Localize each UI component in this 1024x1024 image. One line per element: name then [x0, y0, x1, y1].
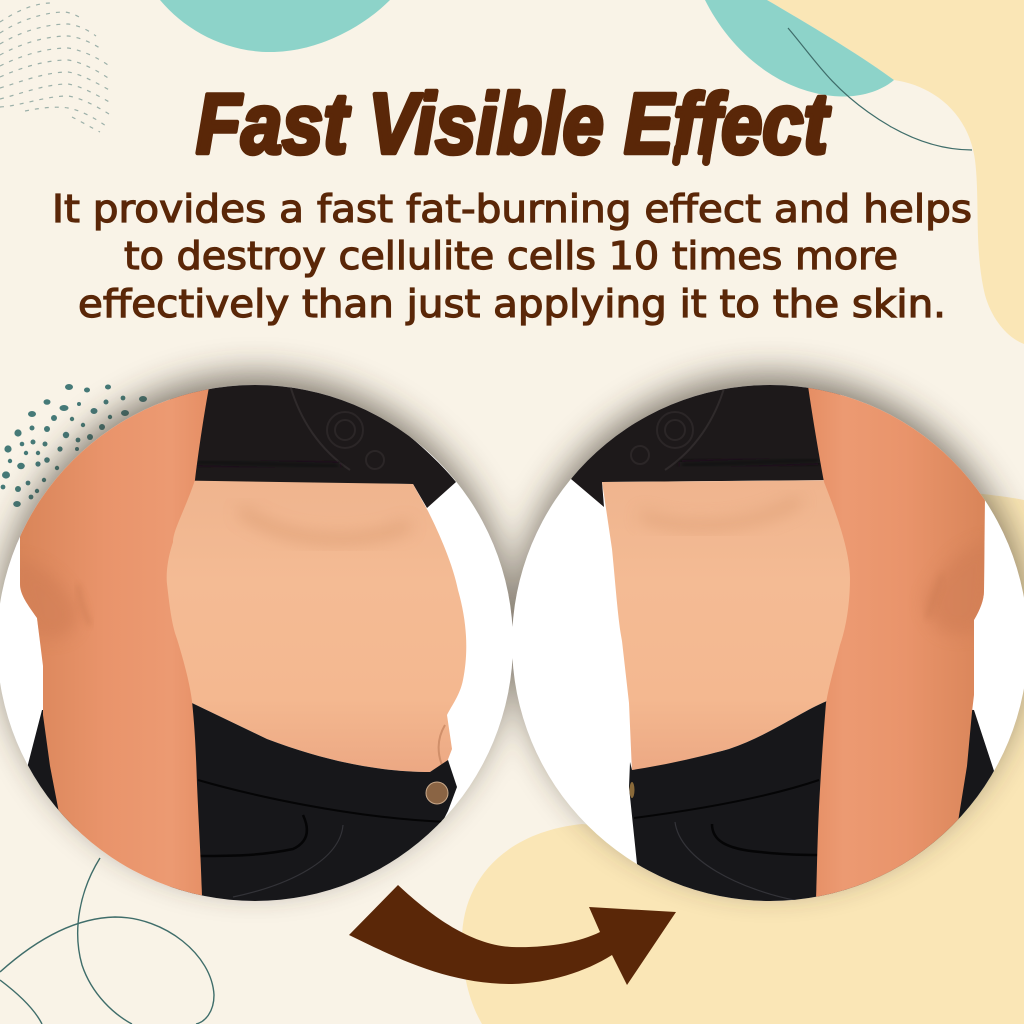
- photo: before (left circle): [0, 380, 520, 910]
- photo: after (right circle): [505, 380, 1024, 910]
- decorative blob: top right cream: [767, 0, 1024, 344]
- body text: effectively than just applying it to the skin.: [78, 282, 946, 326]
- button: [426, 782, 448, 804]
- belly: [602, 480, 860, 772]
- photo background: [0, 380, 520, 910]
- belly: [150, 480, 466, 772]
- body text: to destroy cellulite cells 10 times more: [124, 234, 898, 278]
- decorative dots: left: [1, 384, 147, 507]
- arm: [10, 387, 209, 905]
- trousers: [26, 703, 457, 905]
- photo background: [505, 380, 1024, 910]
- bra: [571, 380, 840, 507]
- trouser rivet: [630, 782, 634, 798]
- body text: It provides a fast fat-burning effect and helps: [52, 187, 972, 231]
- title: Fast Visible Effect: [196, 77, 831, 172]
- body text: [52, 187, 972, 326]
- decorative blob: bottom and right cream: [462, 493, 1024, 1024]
- arrow: [349, 885, 676, 985]
- trousers: [629, 701, 995, 905]
- decorative line: top right curve: [788, 28, 972, 150]
- decorative blob: top teal: [160, 0, 390, 52]
- bra: [170, 380, 456, 508]
- decorative blob: top right teal: [705, 0, 894, 97]
- decorative lines: bottom left: [0, 858, 214, 1024]
- arm: [808, 386, 995, 905]
- decorative dashed dome: top left: [0, 3, 113, 132]
- circle shadows: [0, 374, 1024, 886]
